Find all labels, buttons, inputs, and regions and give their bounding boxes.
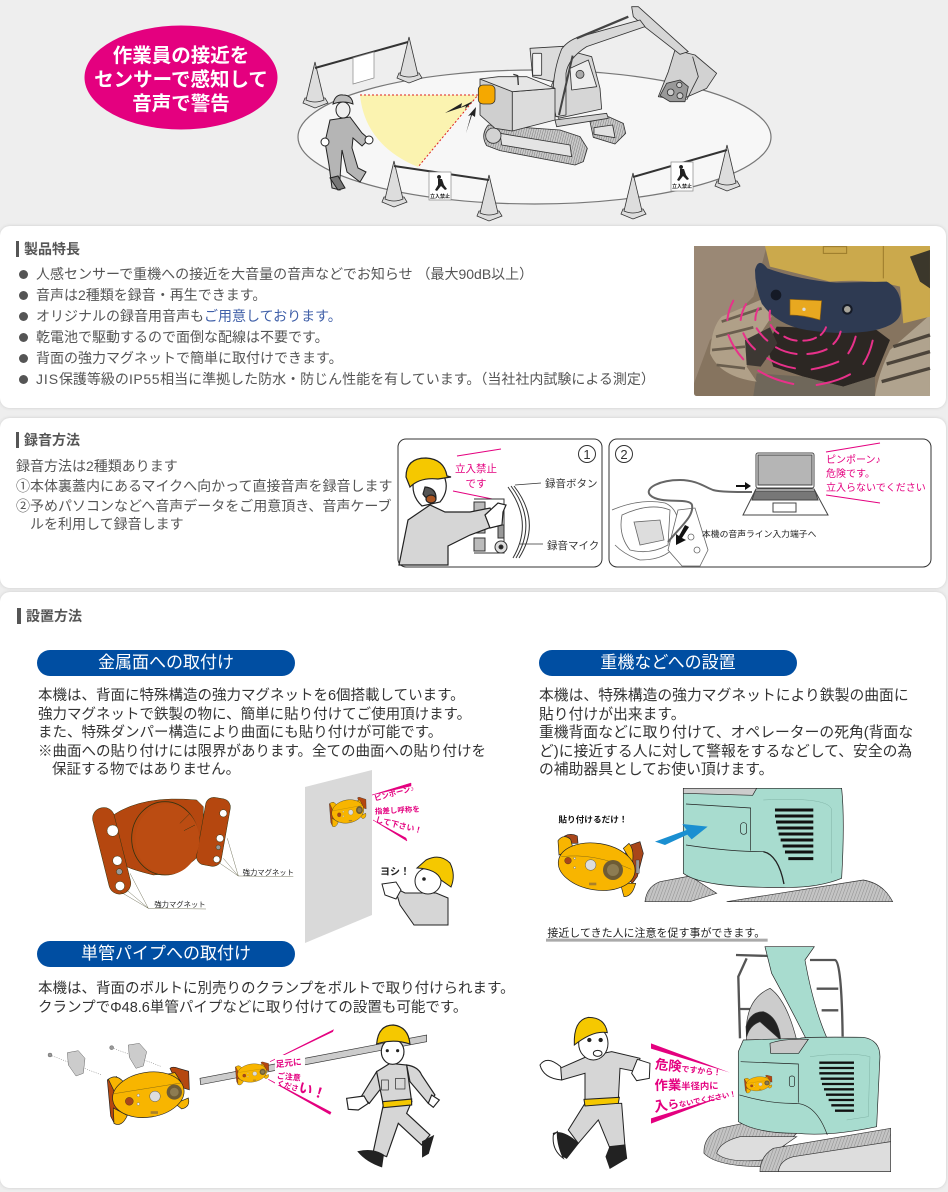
text: metal surface: ※曲面への貼り付けには限界があります。全ての曲面への貼り付けを (38, 744, 486, 760)
label: record mic: 録音マイク (547, 539, 599, 552)
label: audio line in: 本機の音声ライン入力端子へ (702, 528, 817, 539)
list: product features: オリジナルの録音用音声もご用意しております。 (36, 308, 342, 324)
text: heavy machinery: ど)に接近する人に対して警報をするなどして、安全の為 (539, 744, 912, 760)
magnet label left: 強力マグネット (154, 900, 206, 909)
illustration: magnet back of unit (90, 796, 294, 909)
recording box 1 (398, 439, 602, 567)
warning bolts (445, 101, 476, 133)
pink speech: 指差し呼称を (375, 804, 420, 816)
heading: product features: 製品特長 (24, 241, 80, 257)
startled worker (540, 1017, 650, 1168)
text: single pipe (38, 980, 515, 1016)
pill: single pipe (37, 941, 295, 967)
right fence with sign: 立入禁止 (672, 183, 692, 190)
illustration: pipe clamps and unit (48, 1025, 439, 1167)
text: single pipe: クランプでΦ48.6単管パイプなどに取り付けての設置も可能です。 (38, 1000, 467, 1016)
machine arm (765, 947, 827, 1040)
illustration: excavator detection zone (298, 7, 771, 221)
excavator (478, 7, 717, 165)
single pipe (200, 1035, 427, 1085)
yellow unit (555, 834, 643, 897)
blue arrow (655, 824, 708, 845)
text: heavy machinery: 重機背面などに取り付けて、オペレーターの死角(背面な (539, 725, 913, 741)
text: recording method: ルを利用して録音します (30, 516, 184, 532)
machine tracks (645, 876, 893, 902)
text: heavy machinery: 本機は、特殊構造の強力マグネットにより鉄製の曲面に (539, 688, 909, 704)
text: recording method: ②予めパソコンなどへ音声データをご用意頂き、音声ケーブ (16, 498, 391, 514)
clamp hardware (48, 1043, 162, 1076)
pink warning: 足元に (275, 1057, 302, 1069)
pill: single pipe: 単管パイプへの取付け (81, 944, 251, 963)
caption: alerting approaching people: 接近してきた人に注意を促す事ができます。 (547, 926, 765, 940)
sensor unit (478, 85, 495, 104)
pink speech text: 危険です。 (826, 468, 875, 480)
pill: metal surface: 金属面への取付け (98, 653, 234, 672)
text: metal surface: 保証する物ではありません。 (52, 762, 240, 778)
speech pink text: 立入禁止 (455, 462, 497, 475)
teal machine body (683, 788, 843, 887)
illustration: unit and heavy machine rear (546, 788, 893, 942)
list: product features: 背面の強力マグネットで簡単に取付けできます。 (36, 350, 343, 366)
illustration: worker warned by excavator (540, 947, 891, 1172)
cable to device (649, 480, 752, 542)
rear crawler (590, 117, 626, 144)
label: record mic (520, 539, 599, 552)
list: product features: JIS保護等級のIP55相当に準拠した防水・防じん性能を有しています。（当社社内試験による測定） (36, 371, 655, 387)
pill: heavy machinery (539, 650, 797, 676)
work area ellipse (298, 70, 771, 204)
heading: recording method: 録音方法 (24, 432, 80, 448)
deck and front crawler (484, 113, 608, 165)
text: heavy machinery: 貼り付けが出来ます。 (539, 706, 686, 722)
seat (746, 988, 797, 1040)
pink warning megaphone: 作業半径内に (654, 1077, 719, 1093)
magnets (107, 810, 227, 891)
unit on pipe (235, 1062, 269, 1085)
open device (612, 502, 708, 566)
label: record button (515, 477, 598, 490)
laptop (743, 453, 828, 515)
vents (819, 1063, 854, 1111)
arm (632, 7, 688, 54)
text: heavy machinery: の補助器具としてお使い頂けます。 (539, 762, 773, 778)
back-left fence (303, 37, 422, 108)
heading: installation method: 設置方法 (26, 608, 82, 624)
panel: product features (0, 226, 946, 408)
text: single pipe: 本機は、背面のボルトに別売りのクランプをボルトで取り付けられます。 (38, 981, 515, 997)
magnet label right (220, 838, 294, 877)
pink warning: ください！ (276, 1073, 328, 1102)
magnet label left (120, 873, 206, 909)
pink speech text: 立入らないでください (826, 481, 926, 494)
text: metal surface: 強力マグネットで鉄製の物に、簡単に貼り付けてご使用頂けます。 (38, 706, 471, 722)
speech pink text (453, 449, 502, 501)
panel: installation method (0, 592, 946, 1188)
pink warning megaphone (651, 1043, 737, 1124)
boom (553, 17, 645, 117)
list: product features (19, 266, 655, 387)
callout: magenta warning ellipse: センサーで感知して (94, 68, 268, 91)
unit on wall (329, 797, 366, 827)
worker (399, 458, 506, 565)
teal body (738, 1037, 880, 1135)
worker pointing (380, 857, 453, 925)
text: recording method: ①本体裏蓋内にあるマイクへ向かって直接音声を録音します (16, 478, 392, 494)
number 2: 2 (620, 447, 628, 462)
right fence with sign (621, 145, 740, 219)
yellow unit (107, 1067, 189, 1125)
text: heavy machinery (539, 687, 913, 778)
list: product features: 音声は2種類を録音・再生できます。 (36, 287, 266, 303)
bucket (658, 50, 717, 102)
text: metal surface: 本機は、背面に特殊構造の強力マグネットを6個搭載しています。 (38, 688, 465, 704)
speech pink text: です (466, 478, 486, 490)
callout: magenta warning ellipse (84, 26, 278, 130)
pill: heavy machinery: 重機などへの設置 (600, 653, 736, 672)
text: recording method: 録音方法は2種類あります (16, 458, 178, 474)
photo: sensor on excavator bumper (694, 246, 930, 396)
label: record button: 録音ボタン (545, 477, 598, 490)
list: product features: 乾電池で駆動するので面倒な配線は不要です。 (36, 329, 329, 345)
tracks (704, 1123, 891, 1172)
arrows (676, 482, 751, 545)
pink warning (268, 1030, 333, 1114)
sensor detection sector (360, 95, 478, 167)
number 1: 1 (583, 447, 591, 462)
pink speech (372, 783, 423, 841)
pink speech: ピンポーン♪ (373, 784, 415, 803)
worker pointing: ヨシ！ (380, 866, 410, 878)
panel: recording method (0, 418, 946, 588)
guard rail (736, 955, 843, 1038)
pill: metal surface (37, 650, 295, 676)
callout: magenta warning ellipse: 作業員の接近を (113, 45, 249, 67)
worker (321, 95, 373, 190)
callout: magenta warning ellipse: 音声で警告 (132, 93, 230, 115)
unit on machine (744, 1075, 772, 1093)
walking worker (347, 1025, 439, 1167)
cab (530, 46, 602, 118)
unit rear body (90, 796, 232, 896)
recording box 2 (609, 439, 931, 567)
pink warning: ご注意 (276, 1070, 301, 1083)
pink speech text: ピンポーン♪ (826, 454, 880, 466)
number 1 (578, 446, 596, 462)
vents (775, 810, 813, 859)
label: just stick on: 貼り付けるだけ！ (558, 813, 628, 824)
pink warning megaphone: 危険ですから！ (654, 1056, 722, 1079)
engine housing (480, 74, 555, 131)
pink speech: して下さい！ (375, 815, 423, 835)
text: metal surface: また、特殊ダンパー構造により曲面にも貼り付けが可能です。 (38, 725, 442, 741)
front fence with sign: 立入禁止 (430, 193, 450, 200)
front fence with sign (382, 161, 502, 221)
illustration: wall mount (305, 770, 453, 943)
list: product features: 人感センサーで重機への接近を大音量の音声などでお知らせ （最大90dB以上） (36, 266, 533, 282)
number 2 (616, 446, 632, 462)
text: metal surface (38, 687, 486, 778)
steel wall (305, 770, 372, 943)
text: recording method (16, 458, 392, 532)
pink warning megaphone: 入らないでください！ (652, 1083, 737, 1115)
device back panel (474, 486, 529, 558)
pink speech text (826, 443, 926, 503)
magnet label right: 強力マグネット (243, 868, 294, 877)
